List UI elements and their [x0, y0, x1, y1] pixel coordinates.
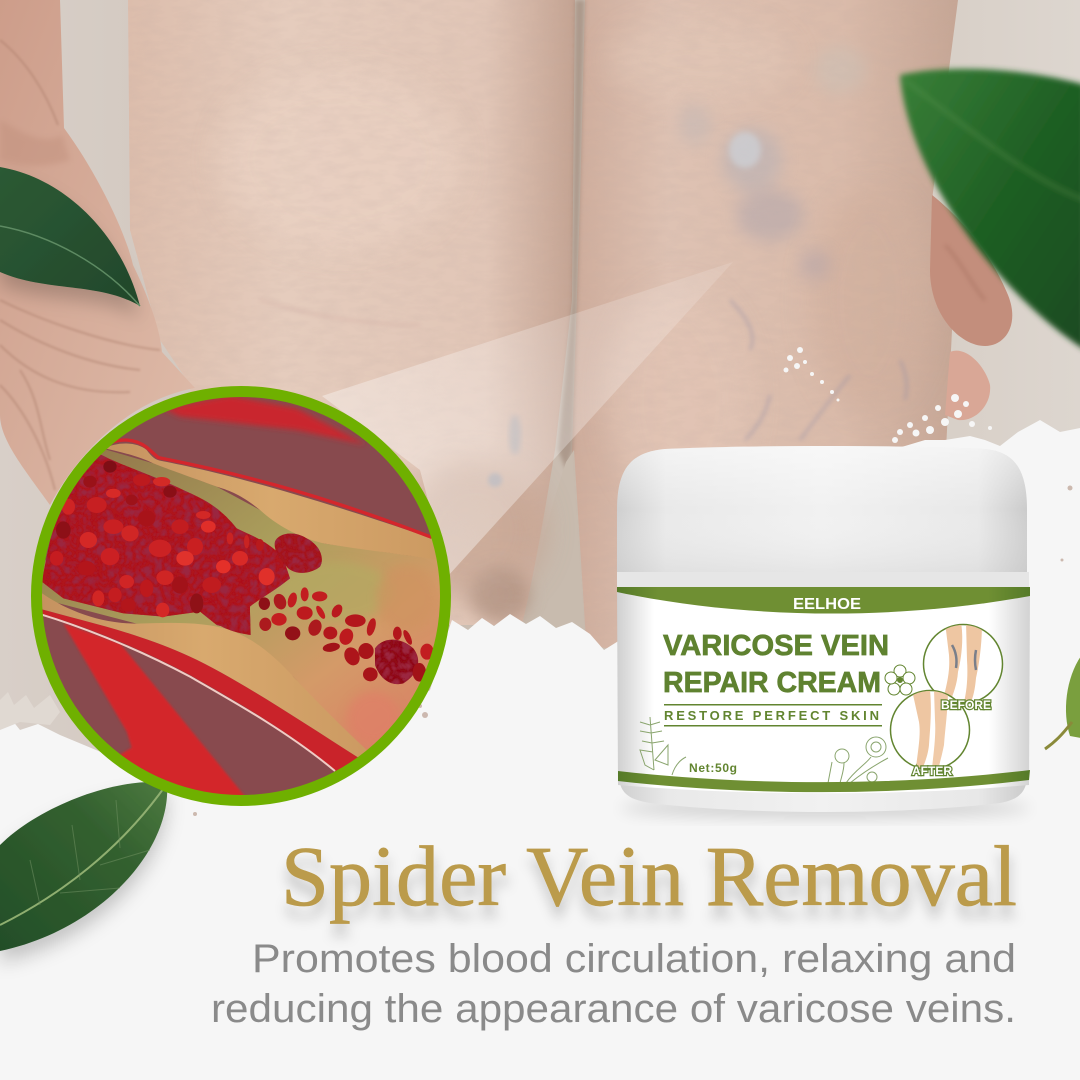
brown specks near magnifier [193, 486, 1072, 816]
product name line 1: VARICOSE VEIN [663, 630, 889, 662]
leaf: bottom left [0, 782, 167, 951]
magnifier interior [42, 397, 440, 795]
description line 2: reducing the appearance of varicose veins. [211, 987, 1016, 1031]
paper speckles [784, 347, 992, 443]
lid ring [617, 572, 1029, 587]
left leg [128, 0, 575, 625]
upper vessel wall [105, 440, 437, 560]
description line 1: Promotes blood circulation, relaxing and [252, 937, 1016, 981]
lower vessel wall [41, 592, 367, 772]
plant drawing left [640, 717, 686, 775]
after circle [890, 690, 970, 770]
photo: legs and hands [0, 0, 1080, 650]
leg gap shadow [558, 0, 585, 470]
description text [211, 937, 1016, 1031]
clots [215, 534, 418, 684]
skin shading [220, 20, 930, 623]
net weight: Net:50g [689, 761, 737, 775]
left hand [0, 0, 195, 505]
background blood vessels [63, 396, 367, 798]
free-flowing red cells [259, 587, 434, 682]
jar label [617, 587, 1030, 793]
plant drawing right [828, 737, 888, 783]
magnifier circle: blocked vein [30, 385, 455, 810]
before label: BEFORE [941, 698, 991, 712]
flower icon [885, 665, 915, 695]
before circle [924, 622, 1002, 704]
product name line 2: REPAIR CREAM [663, 667, 881, 699]
red blood cell mass [42, 453, 290, 633]
jar lid [617, 446, 1027, 572]
after label: AFTER [912, 764, 952, 778]
grey torn patch left [0, 692, 60, 730]
light beam from vein to magnifier [322, 262, 733, 576]
magnifier green ring [36, 392, 446, 800]
leaf: top right, out of focus [900, 69, 1080, 350]
tagline with rules: RESTORE PERFECT SKIN [664, 708, 879, 723]
brand name: EELHOE [793, 596, 861, 613]
vessel lumen [40, 448, 442, 755]
leaf: right edge [1045, 656, 1080, 749]
leaf: top left [0, 167, 140, 306]
white torn paper bottom area [0, 420, 1080, 1080]
right leg [572, 0, 958, 650]
varicose veins [260, 46, 907, 487]
headline: Spider Vein Removal [281, 828, 1017, 924]
right hand fingers [930, 195, 1012, 420]
bottom band [618, 770, 1030, 792]
jar shadow [620, 799, 1030, 817]
skin texture [0, 0, 1080, 640]
wall gap between legs [522, 450, 586, 640]
jar base [619, 775, 1027, 812]
label top band [617, 587, 1030, 614]
product jar [617, 446, 1030, 817]
